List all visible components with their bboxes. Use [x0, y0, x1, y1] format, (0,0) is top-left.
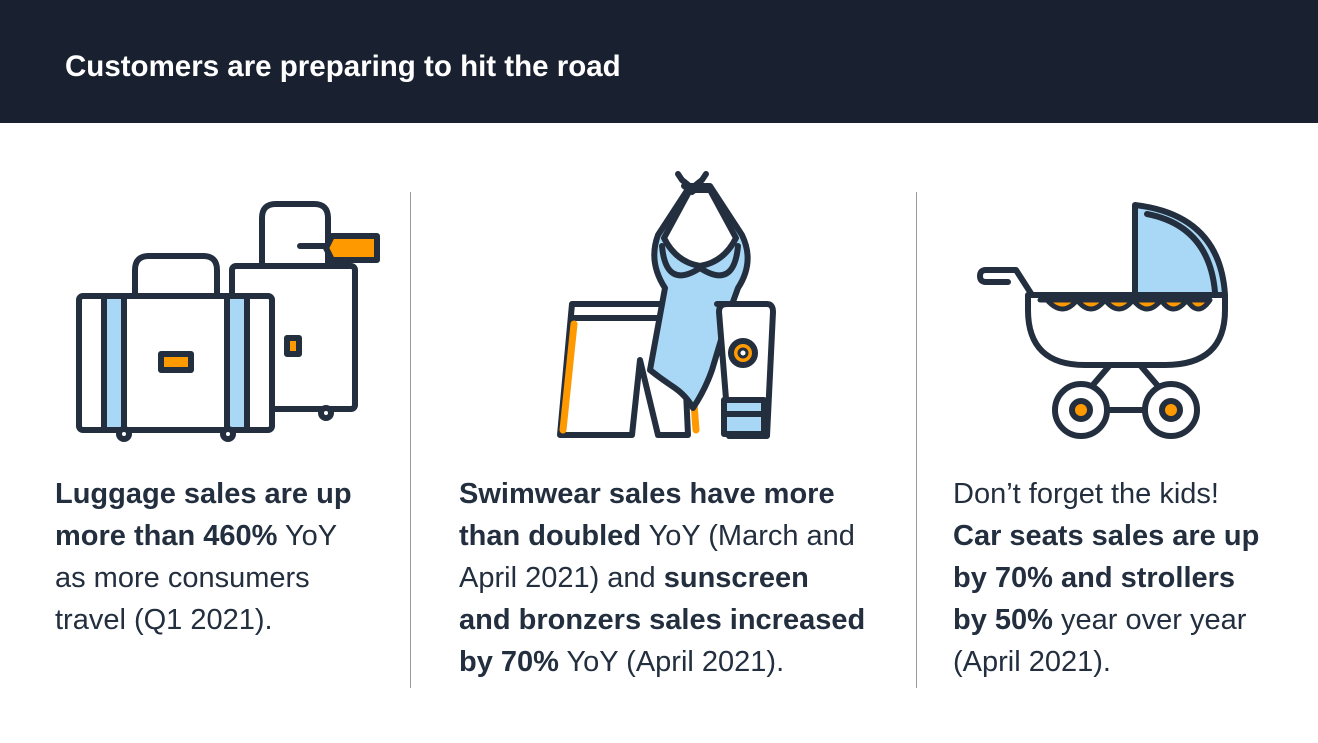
text: swimwear: than doubled YoY (March and [459, 520, 855, 552]
text: luggage: as more consumers [55, 562, 310, 594]
text: kids: (April 2021). [953, 646, 1111, 678]
text: luggage: travel (Q1 2021). [55, 604, 273, 636]
text: swimwear: Swimwear sales have more [459, 478, 835, 510]
text: kids: Car seats sales are up [953, 520, 1259, 552]
text: kids: Don’t forget the kids! [953, 478, 1219, 510]
text: swimwear: by 70% YoY (April 2021). [459, 646, 784, 678]
text: luggage [55, 478, 352, 636]
text: kids [953, 478, 1259, 678]
text: kids: by 50% year over year [953, 604, 1246, 636]
header bar [0, 0, 1318, 123]
text: swimwear: and bronzers sales increased [459, 604, 865, 636]
text: luggage: more than 460% YoY [55, 520, 337, 552]
title: Customers are preparing to hit the road [65, 50, 621, 83]
text: kids: by 70% and strollers [953, 562, 1235, 594]
icon: swimwear and sunscreen [560, 174, 773, 436]
icon: luggage [79, 204, 377, 439]
text: swimwear: April 2021) and sunscreen [459, 562, 809, 594]
icon: stroller [980, 205, 1225, 436]
text: swimwear [459, 478, 865, 678]
text: luggage: Luggage sales are up [55, 478, 352, 510]
